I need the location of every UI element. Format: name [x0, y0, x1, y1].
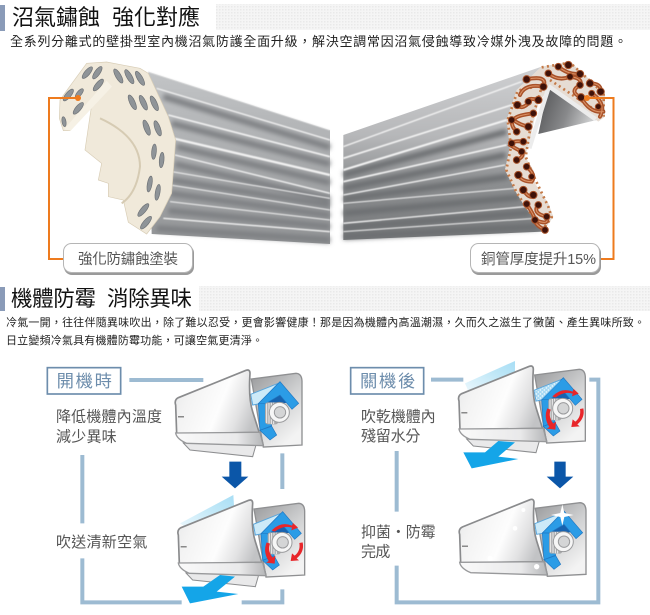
heading: section 2 [0, 286, 650, 311]
panel: after powered off [351, 361, 598, 602]
label: 開機時 [47, 368, 121, 394]
air stream: intake [465, 361, 515, 391]
callout: coating [64, 244, 194, 275]
unit: clean air conditioner [459, 499, 586, 576]
callout: copper tube: 銅管厚度提升15% [481, 250, 596, 268]
left coil: anti-corrosion coated fins [59, 62, 330, 244]
air stream: outflow [463, 441, 518, 468]
frame lines [397, 380, 598, 602]
orange leader dot: left [75, 95, 81, 101]
orange leader line: left [49, 98, 78, 259]
text: lower temperature: 降低機體內溫度 [56, 408, 162, 425]
heading: section 1: 沼氣鏽蝕 強化對應 [12, 5, 200, 30]
intro text: section 1: 全系列分離式的壁掛型室內機沼氣防護全面升級，解決空調常因沼氣侵蝕導致冷媒外洩及故障的問題。 [10, 34, 627, 49]
orange leader line: right [587, 98, 614, 259]
text: fresh air: 吹送清新空氣 [56, 534, 147, 551]
text: antibacterial and mold-proof complete: 抑菌・防霉 [361, 524, 436, 541]
text: antibacterial and mold-proof complete: 完成 [361, 543, 390, 560]
heading: section 1 [0, 4, 650, 31]
heading: section 2: 機體防霉 消除異味 [11, 287, 192, 311]
text: lower temperature: 減少異味 [56, 428, 117, 445]
arrow: down [222, 462, 248, 488]
orange leader dot: right [584, 95, 590, 101]
body text: section 2: 日立變頻冷氣具有機體防霉功能，可讓空氣更清淨。 [6, 333, 263, 347]
unit: idle air conditioner [175, 370, 302, 457]
callout: copper tube [470, 244, 601, 275]
text: dry residual moisture: 殘留水分 [361, 428, 420, 445]
text: dry residual moisture [361, 408, 436, 445]
body text: section 2: 冷氣一開，往往伴隨異味吹出，除了難以忍受，更會影響健康！那是因為機體內高溫潮濕，久而久之滋生了黴菌、產生異味所致。 [6, 315, 645, 329]
unit: running air conditioner [178, 500, 305, 587]
text: antibacterial and mold-proof complete [361, 524, 436, 560]
arrow: down [547, 462, 573, 488]
label: 關機後 [351, 368, 424, 394]
callout: coating: 強化防鏽蝕塗裝 [78, 250, 178, 268]
air stream: outflow [182, 575, 238, 603]
unit: drying air conditioner [459, 366, 585, 453]
text: lower temperature [56, 408, 162, 445]
text: dry residual moisture: 吹乾機體內 [361, 408, 436, 425]
air stream: intake [180, 495, 234, 527]
body text: section 2 [6, 315, 645, 347]
frame lines [82, 380, 282, 602]
right coil: copper tubes [343, 61, 605, 240]
label: 開機時: 開機時 [57, 371, 112, 391]
label: 關機後: 關機後 [360, 371, 415, 391]
panel: when powered on [47, 368, 305, 603]
